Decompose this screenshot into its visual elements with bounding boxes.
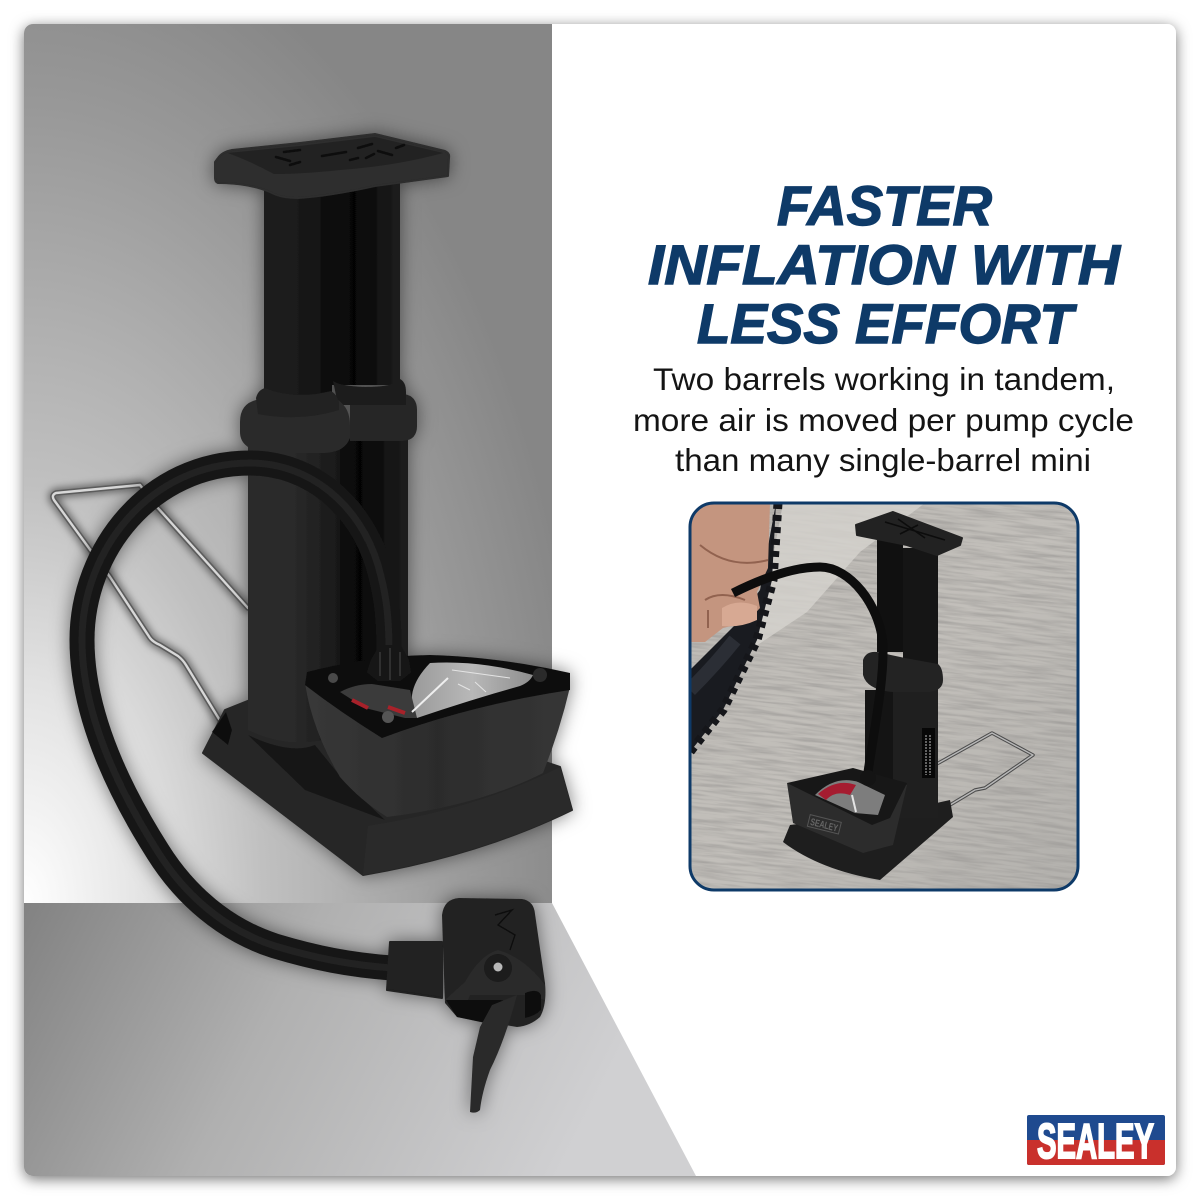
- heading: LESS EFFORT: [697, 292, 1078, 355]
- concrete ground: [685, 498, 1085, 898]
- inset hose: [733, 567, 883, 772]
- description text: than many single-barrel mini: [675, 442, 1091, 478]
- pump body: [82, 134, 572, 1113]
- inset photo: pump in use on concrete: [688, 502, 1080, 892]
- valve head: [387, 898, 545, 1113]
- gauge housing: [305, 655, 570, 817]
- inset lower barrels: [865, 690, 893, 785]
- panel: product backdrop: [24, 24, 696, 1176]
- inset collars: [863, 652, 943, 692]
- heading: FASTER: [777, 174, 993, 237]
- heading: [648, 174, 1122, 355]
- heading: INFLATION WITH: [648, 233, 1122, 296]
- inset base plate: [783, 800, 953, 880]
- front upper barrel: [264, 188, 332, 396]
- description text: [633, 361, 1134, 478]
- inset knob: [864, 784, 866, 786]
- rear lower barrel: [335, 430, 408, 670]
- backdrop floor: [24, 903, 696, 1176]
- inset warning label: [922, 728, 935, 778]
- hand: [690, 503, 770, 642]
- front lower barrel: [248, 440, 340, 742]
- foot handle: [215, 134, 449, 198]
- backdrop wall: [24, 24, 552, 904]
- barrel collars and flange: [240, 379, 417, 453]
- wire foot stand: [53, 485, 248, 732]
- product photo: twin-barrel foot pump: [53, 134, 572, 1113]
- gauge knob: [368, 646, 410, 680]
- valve lever: [470, 995, 517, 1113]
- inset wire stand: [935, 733, 1033, 808]
- rear upper barrel: [330, 180, 400, 385]
- inset border: [690, 503, 1078, 890]
- air hose: [82, 463, 392, 968]
- base plate: [203, 690, 572, 875]
- bicycle tyre: [690, 503, 778, 752]
- description text: Two barrels working in tandem,: [653, 361, 1115, 397]
- inset upper barrels: [877, 540, 903, 652]
- inset SEALEY mark: SEALEY: [809, 817, 839, 835]
- inset gauge: [787, 768, 907, 853]
- description text: more air is moved per pump cycle: [633, 402, 1134, 438]
- inset foot handle: [856, 512, 962, 555]
